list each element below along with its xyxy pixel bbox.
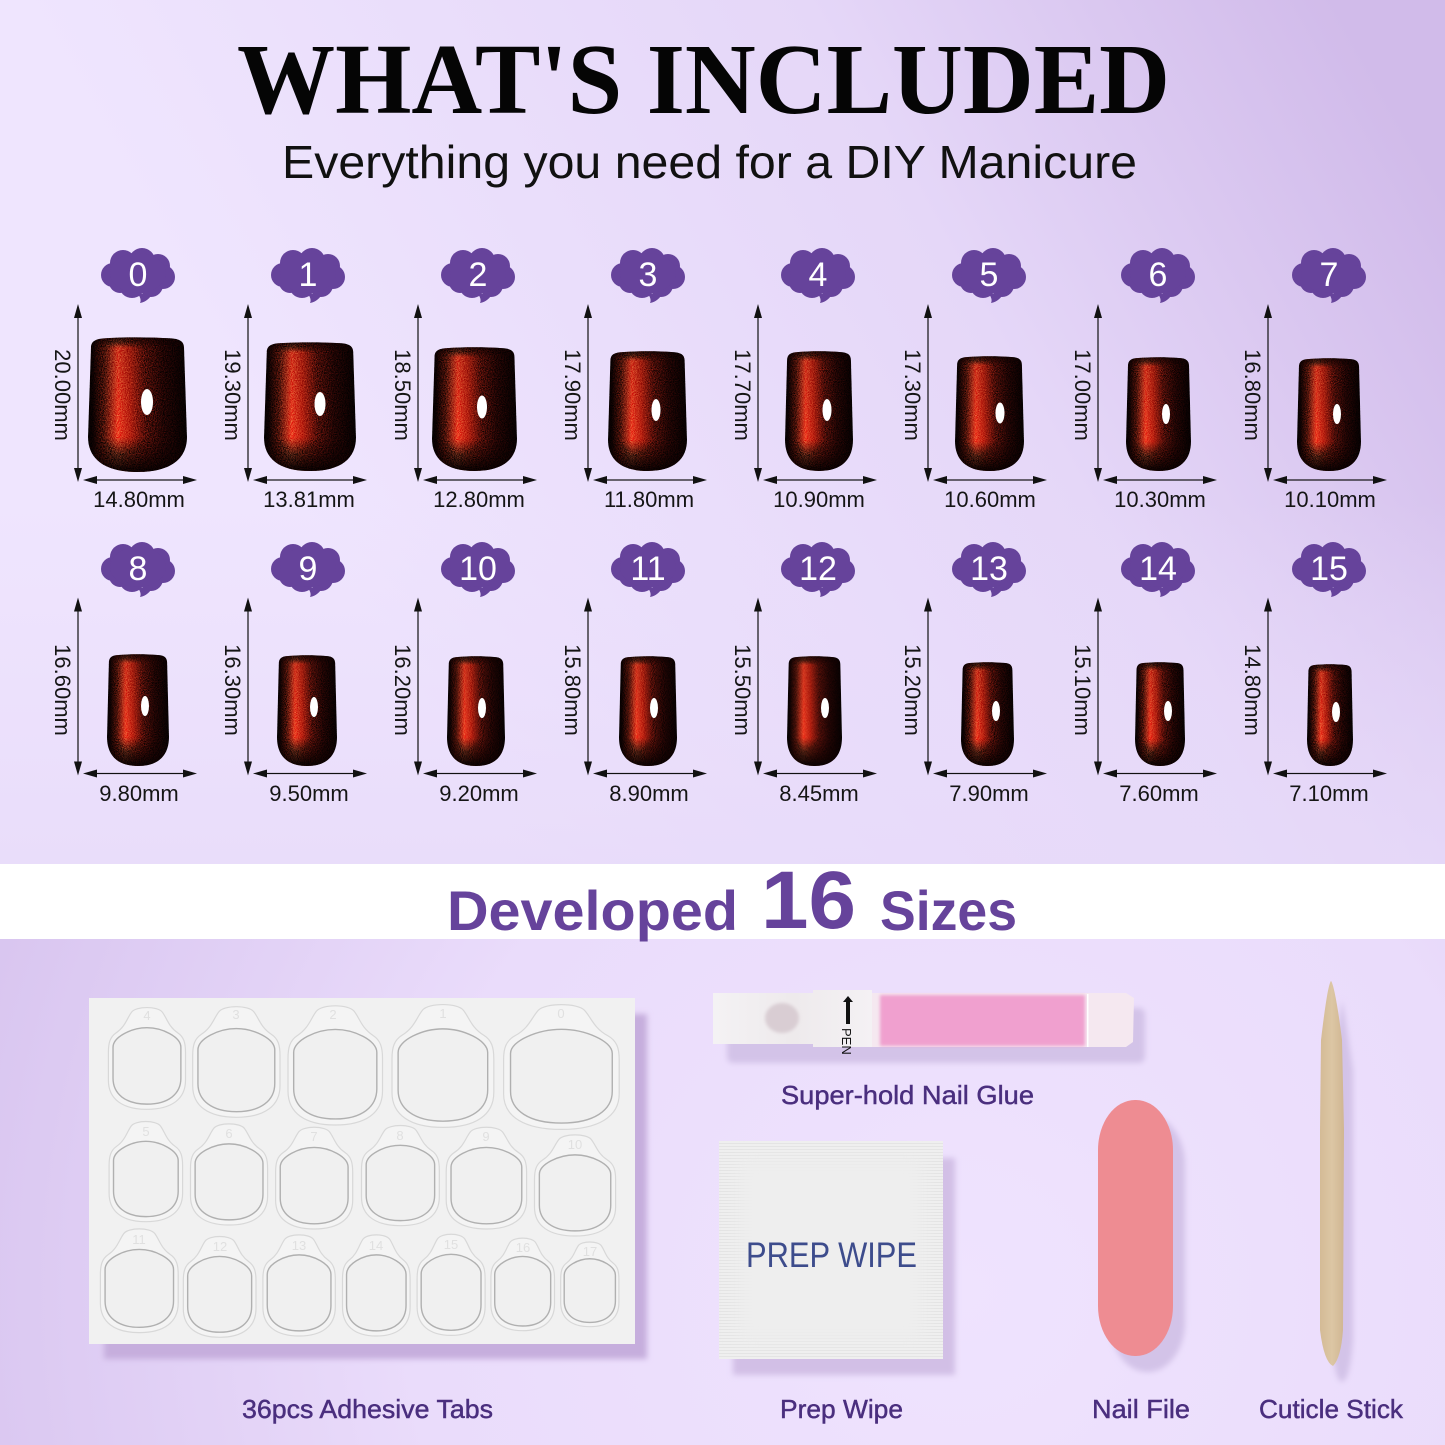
- nail size 13: 7.90mm: [949, 781, 1029, 806]
- nail size 4: 4: [809, 256, 827, 294]
- size chart: bottom row: [50, 542, 1387, 806]
- nail size 1: [220, 248, 367, 512]
- nail size 11: 11: [630, 550, 666, 588]
- caption: adhesive tabs: 36pcs Adhesive Tabs: [242, 1394, 493, 1424]
- nail size 3: 3: [639, 256, 657, 294]
- nail file: [1098, 1100, 1185, 1372]
- nail size 3: [560, 248, 707, 512]
- nail size 8: 16.60mm: [50, 644, 75, 736]
- background: lower section: [0, 939, 1445, 1445]
- nail size 7: 7: [1320, 256, 1338, 294]
- nail size 6: 6: [1149, 256, 1167, 294]
- nail glue tube: PEN: [839, 1028, 854, 1055]
- nail size 13: 13: [970, 550, 1008, 588]
- nail size 3: 17.90mm: [560, 349, 585, 441]
- nail size 4: 10.90mm: [773, 487, 865, 512]
- nail size 5: 17.30mm: [900, 349, 925, 441]
- background: upper section: [0, 0, 1445, 864]
- nail size 12: 12: [799, 550, 837, 588]
- adhesive tabs sheet: [89, 998, 647, 1359]
- adhesive tabs sheet: 8: [396, 1128, 404, 1143]
- nail size 14: 7.60mm: [1119, 781, 1199, 806]
- nail size 0: 20.00mm: [50, 349, 75, 441]
- nail size 0: 0: [129, 256, 147, 294]
- nail size 10: 9.20mm: [439, 781, 519, 806]
- nail size 1: 13.81mm: [263, 487, 355, 512]
- subtitle: Everything you need for a DIY Manicure: [282, 136, 1137, 188]
- nail size 14: 15.10mm: [1070, 644, 1095, 736]
- title: WHAT'S INCLUDED: [237, 23, 1170, 135]
- nail size 6: 10.30mm: [1114, 487, 1206, 512]
- nail size 8: 8: [129, 550, 147, 588]
- nail size 14: 14: [1139, 550, 1177, 588]
- nail size 8: 9.80mm: [99, 781, 179, 806]
- nail size 12: 15.50mm: [730, 644, 755, 736]
- adhesive tabs sheet: 13: [292, 1238, 306, 1253]
- nail size 11: [560, 542, 707, 806]
- adhesive tabs sheet: 9: [482, 1129, 490, 1144]
- nail size 10: 10: [459, 550, 497, 588]
- nail size 2: [390, 248, 537, 512]
- size chart: top row: [50, 248, 1387, 512]
- nail size 5: 10.60mm: [944, 487, 1036, 512]
- heading: developed 16 sizes: 16: [761, 855, 856, 946]
- nail size 12: 8.45mm: [779, 781, 859, 806]
- nail size 15: [1240, 542, 1387, 806]
- heading: developed 16 sizes: [447, 855, 1017, 946]
- nail size 2: 18.50mm: [390, 349, 415, 441]
- nail size 14: [1070, 542, 1217, 806]
- prep wipe packet: PREP WIPE: [746, 1236, 917, 1275]
- adhesive tabs sheet: 2: [329, 1007, 337, 1022]
- adhesive tabs sheet: 3: [232, 1007, 240, 1022]
- nail size 7: [1240, 248, 1387, 512]
- nail size 12: [730, 542, 877, 806]
- caption: cuticle stick: Cuticle Stick: [1259, 1394, 1404, 1424]
- nail size 3: 11.80mm: [604, 487, 694, 512]
- nail size 2: 12.80mm: [433, 487, 525, 512]
- nail size 9: 16.30mm: [220, 644, 245, 736]
- nail size 6: [1070, 248, 1217, 512]
- prep wipe packet: [719, 1141, 955, 1375]
- nail glue tube: [713, 990, 1145, 1063]
- adhesive tabs sheet: 17: [583, 1244, 597, 1259]
- nail size 7: 16.80mm: [1240, 349, 1265, 441]
- nail size 15: 14.80mm: [1240, 644, 1265, 736]
- nail size 7: 10.10mm: [1284, 487, 1376, 512]
- nail size 1: 19.30mm: [220, 349, 245, 441]
- nail size 13: 15.20mm: [900, 644, 925, 736]
- adhesive tabs sheet: 14: [369, 1238, 383, 1253]
- nail size 9: [220, 542, 367, 806]
- nail size 9: 9: [299, 550, 317, 588]
- nail size 0: [50, 248, 197, 512]
- adhesive tabs sheet: 15: [444, 1237, 458, 1252]
- nail size 13: [900, 542, 1047, 806]
- nail size 4: [730, 248, 877, 512]
- adhesive tabs sheet: 11: [132, 1232, 146, 1247]
- nail size 10: [390, 542, 537, 806]
- adhesive tabs sheet: 16: [516, 1240, 530, 1255]
- nail size 9: 9.50mm: [269, 781, 349, 806]
- adhesive tabs sheet: 10: [568, 1137, 582, 1152]
- nail size 8: [50, 542, 197, 806]
- nail size 4: 17.70mm: [730, 349, 755, 441]
- adhesive tabs sheet: 7: [310, 1129, 318, 1144]
- adhesive tabs sheet: 1: [439, 1006, 447, 1021]
- heading: developed 16 sizes: Sizes: [880, 879, 1017, 942]
- nail size 6: 17.00mm: [1070, 349, 1095, 441]
- nail size 1: 1: [299, 256, 317, 294]
- nail size 5: 5: [980, 256, 998, 294]
- nail size 0: 14.80mm: [93, 487, 185, 512]
- caption: prep wipe: Prep Wipe: [780, 1394, 903, 1424]
- adhesive tabs sheet: 0: [557, 1006, 565, 1021]
- nail size 15: 7.10mm: [1289, 781, 1369, 806]
- nail size 11: 15.80mm: [560, 644, 585, 736]
- nail size 11: 8.90mm: [609, 781, 689, 806]
- caption: nail glue: Super-hold Nail Glue: [781, 1080, 1034, 1110]
- caption: nail file: Nail File: [1092, 1394, 1190, 1424]
- nail size 10: 16.20mm: [390, 644, 415, 736]
- adhesive tabs sheet: 5: [142, 1124, 150, 1139]
- background: white band: [0, 864, 1445, 939]
- nail size 15: 15: [1310, 550, 1348, 588]
- adhesive tabs sheet: 4: [143, 1008, 151, 1023]
- adhesive tabs sheet: 12: [213, 1239, 227, 1254]
- nail size 2: 2: [469, 256, 487, 294]
- nail size 5: [900, 248, 1047, 512]
- heading: developed 16 sizes: Developed: [447, 879, 738, 942]
- cuticle stick: [1320, 981, 1353, 1382]
- adhesive tabs sheet: 6: [225, 1126, 233, 1141]
